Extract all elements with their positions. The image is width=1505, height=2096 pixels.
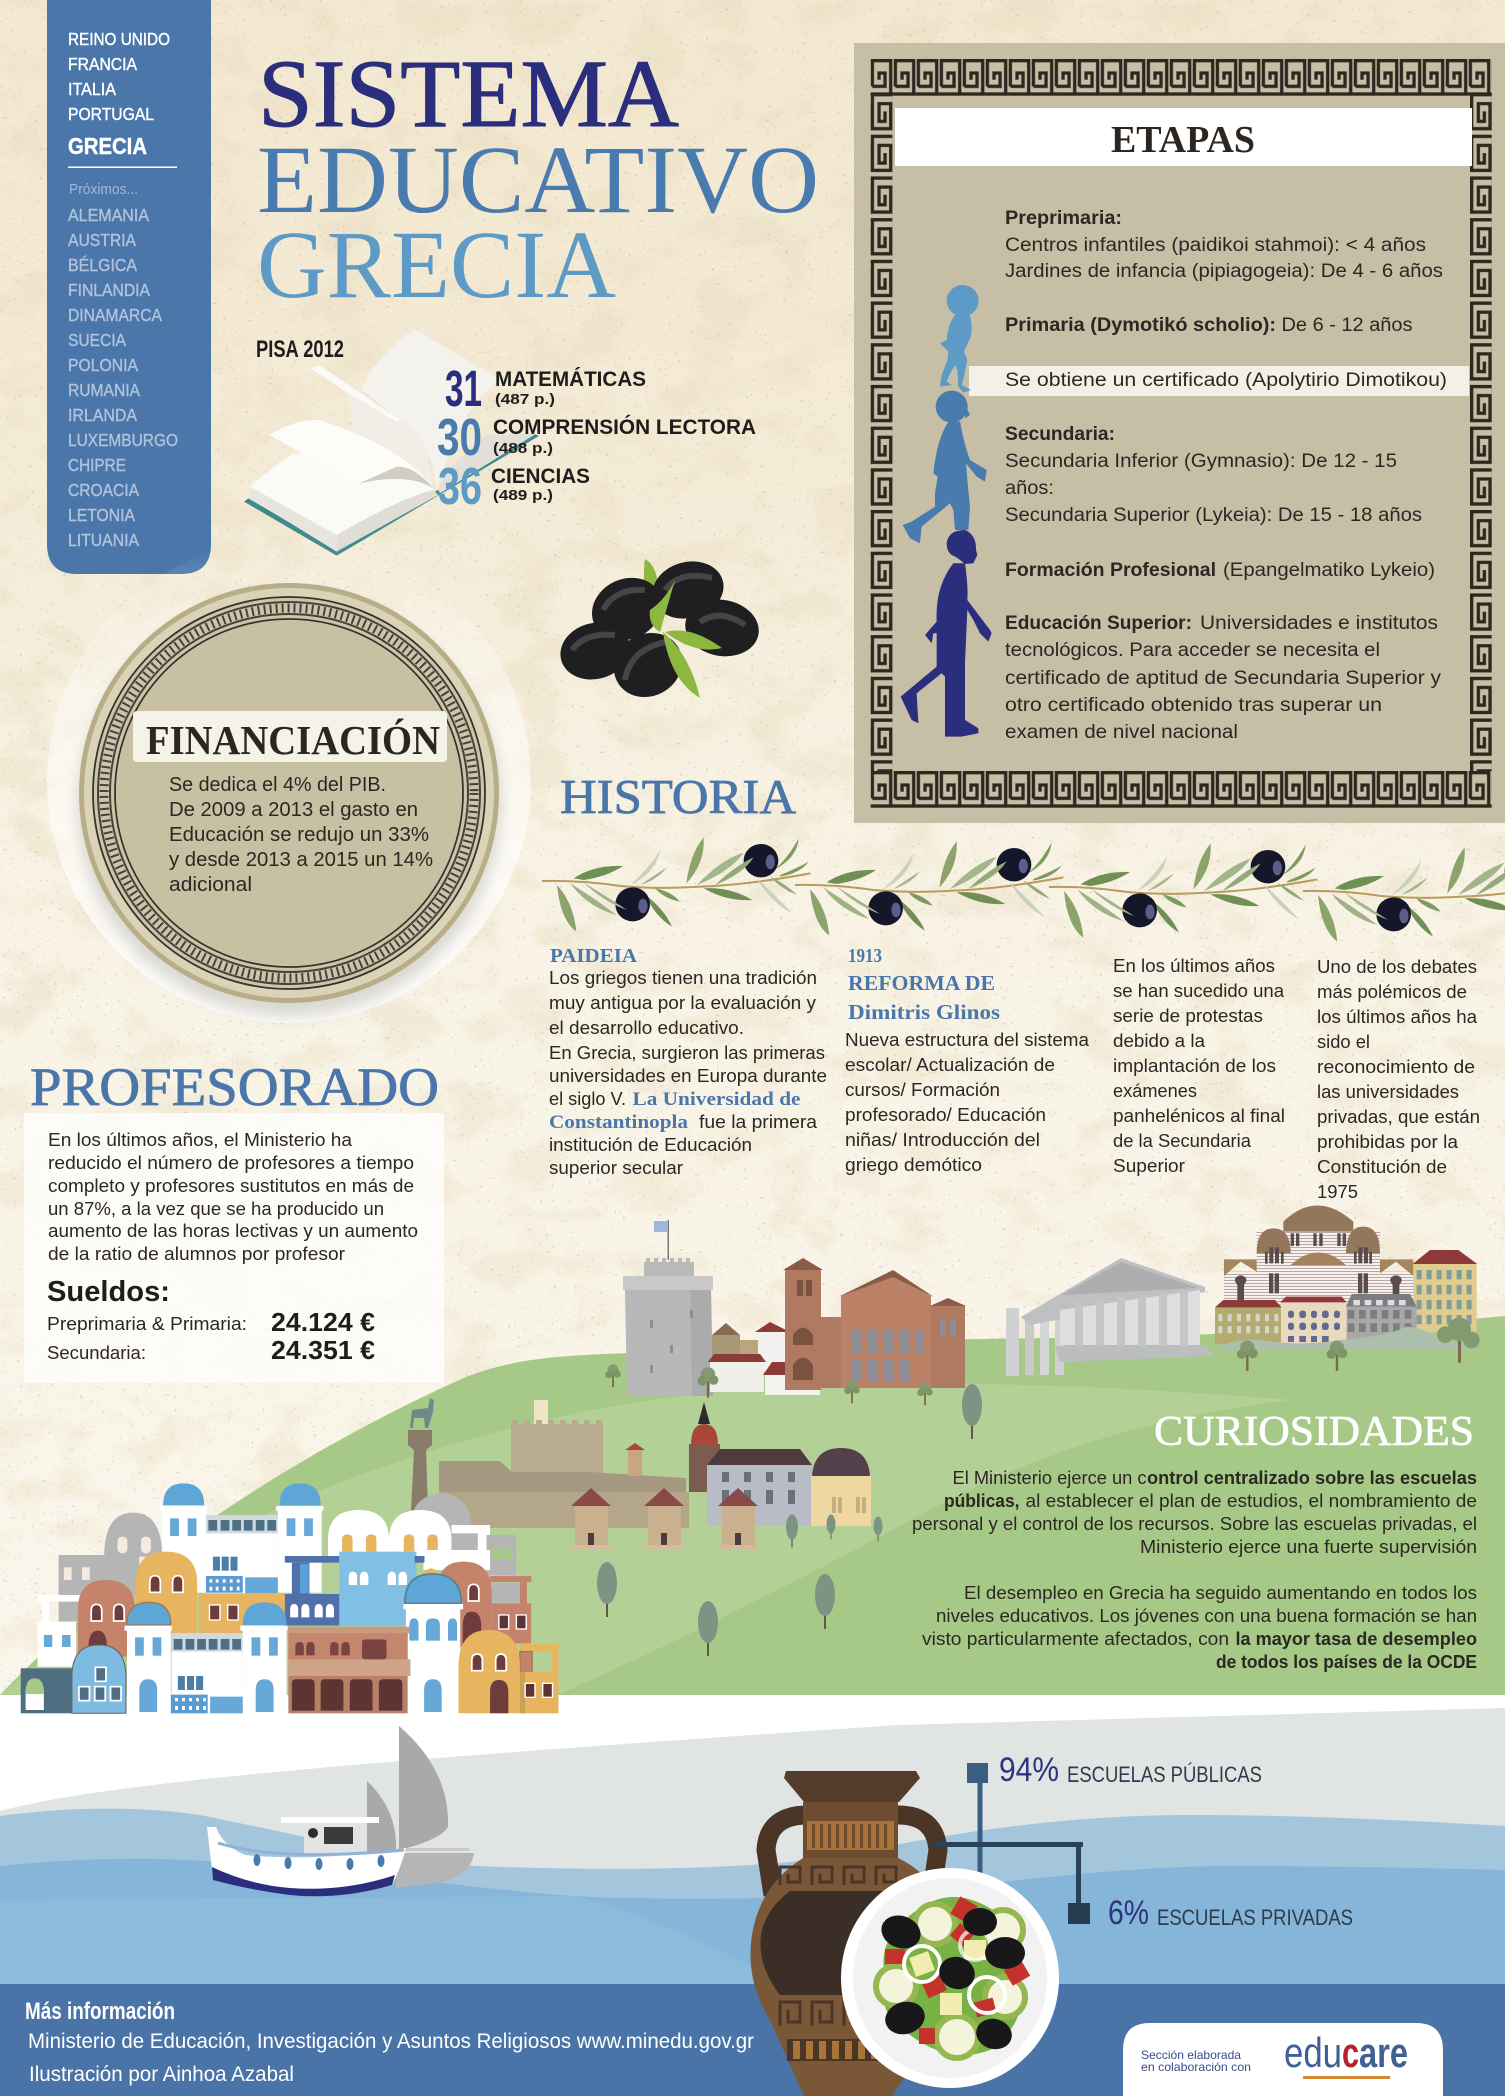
text: debates: privadas, que están bbox=[1317, 1106, 1480, 1127]
text: paideia: PAIDEIA bbox=[550, 945, 638, 967]
text: debates: 1975 bbox=[1317, 1181, 1358, 1202]
teachers text: un 87%, a la vez que se ha producido un bbox=[48, 1199, 384, 1219]
text: 1913 reforma: cursos/ Formación bbox=[845, 1079, 1000, 1100]
panel: country navigation: BÉLGICA bbox=[68, 255, 137, 275]
panel: country navigation: GRECIA bbox=[68, 133, 147, 159]
text: paideia: En Grecia, surgieron las primeras bbox=[549, 1042, 825, 1063]
legend connector lines bbox=[934, 1763, 1090, 1924]
panel: country navigation: SUECIA bbox=[68, 330, 126, 350]
stat: mathematics: MATEMÁTICAS bbox=[495, 368, 646, 391]
text: paideia: universidades en Europa durante bbox=[549, 1065, 827, 1086]
educare logo box: Sección elaborada bbox=[1141, 2048, 1241, 2062]
text: 1913 reforma: niñas/ Introducción del bbox=[845, 1129, 1040, 1150]
panel: profesorado bbox=[24, 1057, 444, 1383]
text: 1913 reforma: REFORMA DE bbox=[848, 971, 995, 995]
icon: sailboat bbox=[207, 1726, 474, 1896]
panel: country navigation: FINLANDIA bbox=[68, 280, 150, 300]
onion rings bbox=[904, 1930, 1005, 2013]
educare logo box bbox=[1123, 2023, 1443, 2096]
text: paideia: Los griegos tienen una tradición bbox=[549, 967, 817, 988]
twin towers lower bbox=[125, 1602, 288, 1713]
small buildings by the tower bbox=[708, 1322, 820, 1395]
curiosities text bbox=[912, 1467, 1477, 1672]
text: protestas: implantación de los bbox=[1113, 1055, 1276, 1076]
funding text bbox=[169, 774, 433, 896]
curiosities text: la mayor tasa de desempleo bbox=[1236, 1628, 1477, 1649]
stages text: Preprimaria: bbox=[1005, 208, 1122, 229]
stat: science bbox=[438, 458, 590, 516]
funding text: adicional bbox=[169, 874, 252, 896]
white domes behind bbox=[328, 1493, 516, 1575]
curiosities text: personal y el control de los recursos. Sobre las escuelas privadas, el bbox=[912, 1513, 1477, 1534]
stages text: tecnológicos. Para acceder se necesita el bbox=[1005, 640, 1380, 661]
footer text bbox=[25, 1998, 754, 2086]
front left houses bbox=[21, 1645, 126, 1713]
text: paideia: muy antigua por la evaluación y bbox=[549, 992, 817, 1013]
curiosities text: al establecer el plan de estudios, el nombramiento de bbox=[1026, 1490, 1477, 1511]
tomato pieces bbox=[885, 1896, 1030, 2044]
salaries: Preprimaria & Primaria: bbox=[47, 1314, 247, 1334]
santorini village bbox=[21, 1483, 558, 1713]
small trees on the upper hill bbox=[605, 1364, 933, 1405]
footer text: Más información bbox=[25, 1998, 175, 2025]
text: protestas: exámenes bbox=[1113, 1080, 1197, 1101]
grey palace bbox=[707, 1449, 812, 1526]
brick church bbox=[783, 1258, 966, 1390]
stat: reading: 30 bbox=[437, 409, 482, 467]
panel: country navigation: FRANCIA bbox=[68, 54, 137, 74]
icon: toddler silhouette bbox=[940, 285, 979, 393]
stages text: Universidades e institutos bbox=[1200, 613, 1438, 634]
heading: profesorado: PROFESORADO bbox=[30, 1057, 439, 1117]
stages text: Secundaria Superior (Lykeia): De 15 - 18 años bbox=[1005, 505, 1422, 526]
stat: private schools: ESCUELAS PRIVADAS bbox=[1157, 1905, 1353, 1930]
stat: private schools bbox=[1108, 1894, 1353, 1932]
panel: etapas bbox=[854, 43, 1505, 823]
teachers text: En los últimos años, el Ministerio ha bbox=[48, 1130, 353, 1150]
stat: science: 36 bbox=[438, 458, 482, 516]
cathedral and town bbox=[1215, 1205, 1480, 1371]
text: 1913 reforma: escolar/ Actualización de bbox=[845, 1054, 1055, 1075]
stat: reading: (488 p.) bbox=[493, 440, 553, 457]
text: paideia bbox=[549, 945, 827, 1178]
stages text: Secundaria: bbox=[1005, 424, 1115, 445]
text: debates: sido el bbox=[1317, 1031, 1370, 1052]
title: SISTEMA bbox=[258, 40, 679, 147]
text: protestas: debido a la bbox=[1113, 1030, 1206, 1051]
stages text: Primaria (Dymotikó scholio): bbox=[1005, 315, 1276, 336]
teachers text: reducido el número de profesores a tiempo bbox=[48, 1153, 414, 1173]
domed building bbox=[811, 1448, 871, 1526]
text: debates: Constitución de bbox=[1317, 1156, 1447, 1177]
cucumber slices bbox=[876, 1904, 1025, 2058]
text: 1913 reforma: profesorado/ Educación bbox=[845, 1104, 1046, 1125]
feta cubes bbox=[909, 1940, 986, 2015]
text: protestas: se han sucedido una bbox=[1113, 980, 1285, 1001]
panel: country navigation: LUXEMBURGO bbox=[68, 430, 178, 450]
stat: science: CIENCIAS bbox=[491, 465, 590, 488]
text: protestas: Superior bbox=[1113, 1155, 1185, 1176]
educare logo box: edu bbox=[1284, 2029, 1342, 2076]
text: paideia: La Universidad de bbox=[632, 1089, 800, 1110]
heading: curiosidades: CURIOSIDADES bbox=[1154, 1409, 1474, 1455]
curiosities text: públicas, bbox=[944, 1490, 1020, 1511]
icon: open book bbox=[244, 329, 539, 556]
panel: country navigation: IRLANDA bbox=[68, 405, 137, 425]
footer text: Ilustración por Ainhoa Azabal bbox=[29, 2063, 294, 2086]
text: debates: los últimos años ha bbox=[1317, 1006, 1478, 1027]
stat: mathematics: (487 p.) bbox=[495, 391, 555, 408]
curiosities text: El desempleo en Grecia ha seguido aumentando en todos los bbox=[964, 1582, 1477, 1603]
educare logo box: en colaboración con bbox=[1141, 2060, 1251, 2074]
stages text: (Epangelmatiko Lykeio) bbox=[1223, 560, 1435, 581]
text: protestas: En los últimos años bbox=[1113, 955, 1275, 976]
panel: PISA 2012: PISA 2012 bbox=[256, 336, 344, 363]
text: 1913 reforma: 1913 bbox=[848, 945, 882, 967]
stages text: años: bbox=[1005, 478, 1054, 499]
panel: country navigation: DINAMARCA bbox=[68, 305, 162, 325]
blue buildings bbox=[285, 1552, 424, 1626]
statue column with deer bbox=[408, 1398, 434, 1510]
icon: olive cluster bbox=[554, 554, 763, 709]
curiosities text: niveles educativos. Los jóvenes con una buena formación se han bbox=[936, 1605, 1477, 1626]
text: 1913 reforma bbox=[845, 945, 1090, 1175]
orange houses bbox=[136, 1552, 285, 1633]
teachers text: completo y profesores sustitutos en más de bbox=[48, 1176, 414, 1196]
rhodes castle and town bbox=[408, 1398, 871, 1549]
stat: reading bbox=[437, 409, 756, 467]
teachers text bbox=[48, 1130, 418, 1264]
stat: public schools: 94% bbox=[999, 1751, 1059, 1789]
curiosities text: de todos los países de la OCDE bbox=[1216, 1651, 1477, 1672]
salaries: Sueldos: bbox=[47, 1276, 170, 1308]
stages text: Educación Superior: bbox=[1005, 613, 1192, 634]
text: debates: Uno de los debates bbox=[1317, 956, 1477, 977]
stages text bbox=[1005, 208, 1447, 743]
handles bbox=[766, 1815, 938, 1895]
panel: country navigation: CHIPRE bbox=[68, 455, 126, 475]
panel: curiosidades bbox=[912, 1409, 1477, 1672]
panel: country navigation: CROACIA bbox=[68, 480, 139, 500]
panel: country navigation: ALEMANIA bbox=[68, 205, 149, 225]
title: GRECIA bbox=[257, 211, 616, 318]
icon: adult silhouette bbox=[901, 530, 992, 737]
text: protestas: de la Secundaria bbox=[1113, 1130, 1252, 1151]
text: paideia: fue la primera bbox=[699, 1111, 818, 1132]
title: EDUCATIVO bbox=[257, 126, 819, 233]
stages text: Secundaria Inferior (Gymnasio): De 12 - 15 bbox=[1005, 451, 1397, 472]
panel: financiacion bbox=[47, 539, 531, 1023]
text: paideia: institución de Educación bbox=[549, 1134, 752, 1155]
funding text: Educación se redujo un 33% bbox=[169, 824, 429, 846]
teachers text: de la ratio de alumnos por profesor bbox=[48, 1244, 345, 1264]
panel: country navigation: ITALIA bbox=[68, 79, 116, 99]
salaries: 24.351 € bbox=[271, 1335, 375, 1365]
text: paideia: el siglo V. bbox=[549, 1088, 626, 1109]
olives bbox=[877, 1908, 1025, 2053]
stat: reading: COMPRENSIÓN LECTORA bbox=[493, 415, 756, 439]
curiosities text: El Ministerio ejerce un c bbox=[952, 1467, 1146, 1488]
heading: financiacion: FINANCIACIÓN bbox=[146, 717, 440, 763]
twin towers upper bbox=[160, 1483, 323, 1597]
panel: country navigation bbox=[47, 0, 211, 574]
clock tower bbox=[689, 1402, 720, 1492]
stages text: Se obtiene un certificado (Apolytirio Dimotikou) bbox=[1005, 370, 1447, 391]
text: paideia: Constantinopla bbox=[549, 1112, 689, 1133]
text: protestas bbox=[1113, 955, 1285, 1176]
stages text: certificado de aptitud de Secundaria Superior y bbox=[1005, 668, 1442, 689]
text: paideia: el desarrollo educativo. bbox=[549, 1017, 744, 1038]
plate of greek salad bbox=[841, 1868, 1059, 2088]
certificate band bbox=[969, 366, 1469, 396]
text: debates bbox=[1317, 956, 1480, 1202]
text: protestas: serie de protestas bbox=[1113, 1005, 1263, 1026]
stat: mathematics bbox=[445, 360, 646, 417]
heading: etapas: ETAPAS bbox=[1111, 119, 1255, 161]
panel: PISA 2012 bbox=[244, 329, 756, 556]
educare logo box: are bbox=[1359, 2029, 1408, 2076]
text: 1913 reforma: griego demótico bbox=[845, 1154, 982, 1175]
text: 1913 reforma: Dimitris Glinos bbox=[848, 1000, 1000, 1024]
text: 1913 reforma: Nueva estructura del sistema bbox=[845, 1029, 1090, 1050]
text: protestas: panhelénicos al final bbox=[1113, 1105, 1285, 1126]
stat: science: (489 p.) bbox=[493, 487, 553, 504]
stat: public schools bbox=[999, 1751, 1262, 1789]
curiosities text: Ministerio ejerce una fuerte supervisión bbox=[1140, 1536, 1477, 1557]
panel: country navigation: RUMANIA bbox=[68, 380, 140, 400]
educare logo box: c bbox=[1342, 2029, 1359, 2076]
title bbox=[257, 40, 819, 318]
white tower right bbox=[403, 1574, 463, 1713]
windmills bbox=[571, 1488, 758, 1549]
footer text: Ministerio de Educación, Investigación y Asuntos Religiosos www.minedu.gov.gr bbox=[28, 2030, 754, 2053]
stat: mathematics: 31 bbox=[445, 360, 482, 417]
white tower bbox=[623, 1220, 713, 1396]
stages text: De 6 - 12 años bbox=[1282, 315, 1412, 336]
parthenon ruins bbox=[1006, 1258, 1215, 1376]
stages text: examen de nivel nacional bbox=[1005, 722, 1238, 743]
stat: private schools: 6% bbox=[1108, 1894, 1149, 1932]
text: debates: las universidades bbox=[1317, 1081, 1459, 1102]
olive branches bbox=[542, 837, 1505, 942]
panel: country navigation: Próximos... bbox=[69, 181, 138, 198]
panel: country navigation: AUSTRIA bbox=[68, 230, 136, 250]
green hills bbox=[0, 1316, 1505, 1695]
salaries bbox=[47, 1276, 375, 1365]
panel: country navigation: PORTUGAL bbox=[68, 104, 154, 124]
heading: historia: HISTORIA bbox=[560, 769, 797, 824]
stages text: Centros infantiles (paidikoi stahmoi): < 4 años bbox=[1005, 235, 1426, 256]
brick restaurant bbox=[287, 1627, 410, 1713]
stat: public schools: ESCUELAS PÚBLICAS bbox=[1067, 1762, 1262, 1787]
white shore and sea bbox=[0, 1695, 1505, 1995]
stages text: Jardines de infancia (pipiagogeia): De 4 - 6 años bbox=[1005, 261, 1443, 282]
curiosities text: ontrol centralizado sobre las escuelas bbox=[1147, 1467, 1477, 1488]
icon: child silhouette bbox=[903, 391, 987, 543]
funding text: De 2009 a 2013 el gasto en bbox=[169, 799, 418, 821]
funding text: Se dedica el 4% del PIB. bbox=[169, 774, 386, 796]
funding text: y desde 2013 a 2015 un 14% bbox=[169, 849, 433, 871]
text: debates: más polémicos de bbox=[1317, 981, 1467, 1002]
text: paideia: superior secular bbox=[549, 1157, 683, 1178]
panel: country navigation: LITUANIA bbox=[68, 530, 139, 550]
panel: country navigation: REINO UNIDO bbox=[68, 29, 170, 49]
heading: etapas bbox=[895, 108, 1472, 166]
curiosities text: visto particularmente afectados, con bbox=[922, 1628, 1229, 1649]
panel: country navigation: LETONIA bbox=[68, 505, 135, 525]
salaries: Secundaria: bbox=[47, 1343, 146, 1363]
meander border bbox=[871, 59, 1492, 808]
teachers text: aumento de las horas lectivas y un aumento bbox=[48, 1221, 418, 1241]
footer bar bbox=[0, 1984, 1505, 2096]
salaries: 24.124 € bbox=[271, 1307, 375, 1337]
text: debates: reconocimiento de bbox=[1317, 1056, 1475, 1077]
amphora bbox=[750, 1771, 955, 2096]
stages text: Formación Profesional bbox=[1005, 560, 1216, 581]
text: debates: prohibidas por la bbox=[1317, 1131, 1459, 1152]
orange house front bbox=[459, 1630, 558, 1713]
cypress trees bbox=[597, 1384, 982, 1656]
stages text: otro certificado obtenido tras superar un bbox=[1005, 695, 1382, 716]
panel: country navigation: POLONIA bbox=[68, 355, 138, 375]
terracotta right bbox=[422, 1562, 531, 1647]
